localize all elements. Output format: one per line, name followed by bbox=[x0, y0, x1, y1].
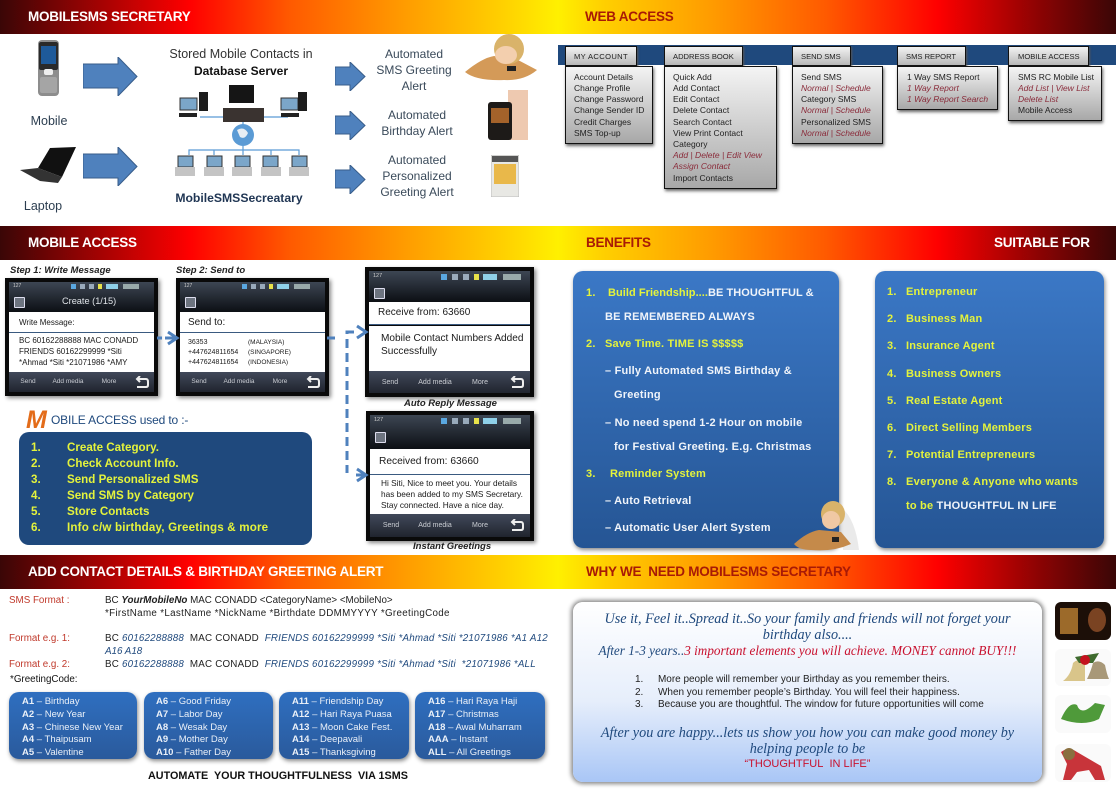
menu: mobile access: Delete List bbox=[1018, 94, 1058, 104]
menu: sms report: SMS REPORT bbox=[906, 52, 956, 61]
panel: suitable for: Potential Entrepreneurs bbox=[906, 449, 1035, 461]
panel: mobile access uses: 6. bbox=[31, 521, 41, 534]
phone: write message: *Ahmad *Siti *21071986 *AMY bbox=[19, 358, 128, 367]
panel: greeting codes a1 to a5: A1 – Birthday bbox=[22, 696, 80, 707]
heading: mobile access used to: OBILE ACCESS used to :- bbox=[51, 413, 188, 427]
phone: instant greeting: has been added to my SMS Secretary. bbox=[381, 489, 523, 499]
panel: benefits bbox=[573, 271, 839, 548]
panel: greeting codes a1 to a5: A2 – New Year bbox=[22, 709, 85, 720]
phone: write message: Write Message: bbox=[19, 318, 74, 327]
dashed arrows between phones bbox=[157, 324, 369, 482]
panel: suitable for: Everyone & Anyone who wants bbox=[906, 476, 1078, 488]
menu: address book: View Print Contact bbox=[673, 128, 743, 138]
panel: greeting codes a16 to all: A16 – Hari Raya Haji bbox=[428, 696, 517, 707]
panel: suitable for: Real Estate Agent bbox=[906, 395, 1003, 407]
panel: suitable for: 4. bbox=[887, 368, 897, 380]
text: script closing bbox=[600, 725, 1014, 757]
panel: benefits: BE REMEMBERED ALWAYS bbox=[605, 311, 755, 323]
list: three reasons: 2. bbox=[635, 686, 643, 698]
menu: send sms: Personalized SMS bbox=[801, 117, 871, 127]
web access menu band bbox=[558, 45, 1116, 65]
text: sms greeting alert bbox=[376, 47, 452, 93]
menu: my account: MY ACCOUNT bbox=[574, 52, 628, 61]
phone: send to: (MALAYSIA) bbox=[248, 339, 284, 346]
text block: sms format: Format e.g. 2: bbox=[9, 659, 70, 670]
phone: send to: Send bbox=[191, 378, 207, 385]
phone: write message: 127 bbox=[13, 283, 21, 289]
menu: my account: Change Password bbox=[574, 94, 643, 104]
list: reason text: More people will remember your Birthday as you remember theirs. bbox=[658, 674, 950, 685]
text: sms greeting alert: Automated bbox=[385, 47, 443, 61]
panel: suitable for: Entrepreneur bbox=[906, 286, 977, 298]
phone: send to: (INDONESIA) bbox=[248, 359, 288, 366]
image: festival lights bbox=[1055, 602, 1111, 640]
panel: benefits: Build Friendship....BE THOUGHTFUL & bbox=[608, 287, 814, 299]
text: sms greeting alert: SMS Greeting bbox=[376, 63, 452, 77]
image: selamat aidilfitri bbox=[1061, 703, 1105, 723]
menu: sms report: 1 Way Report Search bbox=[907, 94, 988, 104]
phone: instant greeting bbox=[366, 411, 534, 541]
menu: mobile access bbox=[1006, 46, 1106, 126]
arrow: laptop to server bbox=[83, 147, 138, 186]
panel: suitable for: 8. bbox=[887, 476, 896, 488]
icon: laptop bbox=[20, 147, 76, 183]
image: small woman with phone bbox=[794, 501, 859, 550]
panel: greeting codes a16 to all: AAA – Instant bbox=[428, 734, 488, 745]
phone: write message bbox=[5, 278, 158, 396]
phone: instant greeting: Received from: 63660 bbox=[379, 456, 479, 467]
menu: my account: Credit Charges bbox=[574, 117, 631, 127]
panel: benefits: 1. bbox=[586, 287, 596, 299]
panel: mobile access uses bbox=[19, 432, 312, 545]
panel: greeting codes a11 to a15: A14 – Deepavali bbox=[292, 734, 362, 745]
menu: mobile access: SMS RC Mobile List bbox=[1018, 72, 1094, 82]
text: birthday alert: Birthday Alert bbox=[381, 124, 453, 138]
heading: stored contacts bbox=[169, 47, 313, 78]
panel: greeting codes a16 to all: ALL – All Greetings bbox=[428, 747, 511, 758]
panel: greeting codes a6 to a10: A8 – Wesak Day bbox=[156, 722, 227, 733]
panel: mobile access uses: 5. bbox=[31, 505, 41, 518]
list: reason text: When you remember people’s Birthday. You will feel their happiness. bbox=[658, 686, 960, 698]
panel: mobile access uses: Send SMS by Category bbox=[67, 489, 194, 502]
panel: mobile access uses: 4. bbox=[31, 489, 41, 502]
phone: auto reply: Successfully bbox=[381, 346, 437, 357]
text block: sms format bbox=[9, 595, 548, 685]
menu: my account bbox=[564, 46, 656, 148]
menu: address book: Search Contact bbox=[673, 117, 732, 127]
menu: mobile access: Mobile Access bbox=[1018, 105, 1072, 115]
text block: sms format: A16 A18 bbox=[105, 646, 142, 657]
menu: address book: Add | Delete | Edit View bbox=[673, 150, 762, 160]
label: mobilesmssecreatary: MobileSMSSecreatary bbox=[175, 191, 303, 205]
menu: sms report: 1 Way Report bbox=[907, 83, 959, 93]
text: script intro: After 1-3 years..3 important elements you will achieve. MONEY cannot BUY!!! bbox=[599, 643, 1016, 658]
panel: benefits: Save Time. TIME IS $$$$$ bbox=[605, 338, 744, 350]
phone: send to: 36353 bbox=[188, 339, 207, 346]
text: script closing: After you are happy...lets us show you how you can make good money by bbox=[601, 725, 1014, 741]
image: woman with phone bbox=[465, 34, 537, 80]
menu: mobile access: Add List | View List bbox=[1018, 83, 1090, 93]
phone: send to: Send to: bbox=[188, 317, 225, 328]
text: personalized greeting alert: Personalized bbox=[382, 169, 452, 183]
panel: greeting codes a16 to all bbox=[415, 692, 545, 759]
phone: send to: Add media bbox=[223, 378, 255, 385]
header bar: mobilesms secretary and web access: WEB ACCESS bbox=[585, 9, 674, 24]
list: reason text: Because you are thoughtful. The window for future opportunities will come bbox=[658, 699, 984, 710]
panel: benefits: – Auto Retrieval bbox=[605, 495, 692, 507]
panel: greeting codes a1 to a5: A5 – Valentine bbox=[22, 747, 84, 758]
panel: benefits: 3. bbox=[586, 468, 596, 480]
phone: write message: Add media bbox=[52, 378, 84, 385]
phone: write message: BC 60162288888 MAC CONADD bbox=[19, 336, 138, 345]
phone: send to: +447624811654 bbox=[188, 359, 238, 366]
panel: suitable for: Insurance Agent bbox=[906, 340, 995, 352]
panel: greeting codes a11 to a15: A12 – Hari Raya Puasa bbox=[292, 709, 392, 720]
menu: sms report: 1 Way SMS Report bbox=[907, 72, 979, 82]
panel: suitable for bbox=[875, 271, 1104, 548]
phone: auto reply: Mobile Contact Numbers Added bbox=[381, 333, 524, 344]
panel: suitable for: Business Owners bbox=[906, 368, 1001, 380]
text block: sms format: *GreetingCode: bbox=[10, 674, 78, 685]
caption: instant greetings: Instant Greetings bbox=[413, 541, 491, 552]
panel: mobile access uses: Check Account Info. bbox=[67, 457, 179, 470]
caption: step 2: Step 2: Send to bbox=[176, 265, 245, 276]
panel: greeting codes a11 to a15: A13 – Moon Cake Fest. bbox=[292, 722, 392, 733]
panel: suitable for: 6. bbox=[887, 422, 897, 434]
image: phone and face bbox=[488, 90, 528, 140]
panel: mobile access uses: 1. bbox=[31, 441, 41, 454]
panel: suitable for: 1. bbox=[887, 286, 897, 298]
text: personalized greeting alert: Automated bbox=[388, 153, 446, 167]
menu: my account: Account Details bbox=[574, 72, 633, 82]
menu: send sms: Category SMS bbox=[801, 94, 856, 104]
text block: sms format: BC 60162288888 MAC CONADD FRIENDS 60162299999 *Siti *Ahmad *Siti *21071986 *ALL bbox=[105, 659, 536, 670]
phone: instant greeting: Stay connected. Have a nice day. bbox=[381, 500, 504, 510]
text block: sms format: BC 60162288888 MAC CONADD FRIENDS 60162299999 *Siti *Ahmad *Siti *21071986 *A1 A12 bbox=[105, 633, 548, 644]
text: birthday alert: Automated bbox=[388, 108, 446, 122]
panel: suitable for: 3. bbox=[887, 340, 897, 352]
menu: mobile access: MOBILE ACCESS bbox=[1018, 52, 1080, 61]
menu: address book: Edit Contact bbox=[673, 94, 719, 104]
text block: sms format: Format e.g. 1: bbox=[9, 633, 70, 644]
heading: mobile access used to: M bbox=[26, 406, 47, 434]
phone: instant greeting: Add media bbox=[418, 522, 452, 529]
menu: sms report bbox=[896, 46, 1002, 114]
menu: send sms: Send SMS bbox=[801, 72, 842, 82]
panel: mobile access uses: Create Category. bbox=[67, 441, 159, 454]
menu: address book: Import Contacts bbox=[673, 173, 733, 183]
phone: auto reply: More bbox=[472, 379, 488, 386]
panel: mobile access uses: 2. bbox=[31, 457, 41, 470]
header bar: mobile access, benefits, suitable for: SUITABLE FOR bbox=[994, 235, 1090, 250]
list: three reasons bbox=[635, 674, 643, 710]
text: birthday alert bbox=[381, 108, 453, 138]
list: three reasons: 3. bbox=[635, 699, 643, 710]
panel: greeting codes a1 to a5 bbox=[9, 692, 137, 759]
panel: benefits: Reminder System bbox=[610, 468, 706, 480]
image: lion dance bbox=[1061, 748, 1105, 780]
menu: my account: Change Profile bbox=[574, 83, 630, 93]
menu: send sms: Normal | Schedule bbox=[801, 105, 871, 115]
panel: suitable for: 2. bbox=[887, 313, 897, 325]
phone: auto reply: Add media bbox=[418, 379, 452, 386]
label: laptop: Laptop bbox=[24, 199, 62, 213]
list: three reasons: 1. bbox=[635, 674, 643, 685]
panel: suitable for: Direct Selling Members bbox=[906, 422, 1032, 434]
panel: greeting codes a6 to a10: A7 – Labor Day bbox=[156, 709, 223, 720]
menu: address book: Add Contact bbox=[673, 83, 720, 93]
label: mobile: Mobile bbox=[31, 114, 67, 128]
text: personalized greeting alert: Greeting Alert bbox=[380, 185, 454, 199]
image: christmas bells bbox=[1063, 653, 1109, 681]
panel: greeting codes a1 to a5: A4 – Thaipusam bbox=[22, 734, 92, 745]
panel: greeting codes a6 to a10 bbox=[144, 692, 273, 759]
text: thoughtful in life: “THOUGHTFUL IN LIFE” bbox=[745, 758, 870, 770]
phone: auto reply: 127 bbox=[373, 273, 382, 279]
header bar: add contact details and why we need: WHY WE NEED MOBILESMS SECRETARY bbox=[586, 564, 851, 579]
menu: my account: Change Sender ID bbox=[574, 105, 644, 115]
panel: greeting codes a11 to a15 bbox=[279, 692, 409, 759]
arrow: greeting alert bbox=[335, 62, 366, 91]
panel: suitable for: to be THOUGHTFUL IN LIFE bbox=[906, 500, 1057, 512]
menu: address book: Quick Add bbox=[673, 72, 712, 82]
phone: send to: +447624811654 bbox=[188, 349, 238, 356]
text: script intro bbox=[598, 611, 1016, 658]
arrow: personalized alert bbox=[335, 165, 366, 194]
phone: instant greeting: Hi Siti, Nice to meet you. Your details bbox=[381, 478, 517, 488]
header bar: mobilesms secretary and web access bbox=[0, 0, 1116, 34]
panel: mobile access uses: Info c/w birthday, Greetings & more bbox=[67, 521, 268, 534]
text: personalized greeting alert bbox=[380, 153, 454, 199]
phone: write message: More bbox=[102, 378, 116, 385]
menu: address book: ADDRESS BOOK bbox=[673, 52, 734, 61]
menu: send sms: Normal | Schedule bbox=[801, 83, 871, 93]
phone: send to bbox=[176, 278, 329, 396]
text block: sms format: *FirstName *LastName *NickName *Birthdate DDMMYYYY *GreetingCode bbox=[105, 608, 450, 619]
panel: benefits: – Fully Automated SMS Birthday & bbox=[605, 365, 792, 377]
caption: step 1: Step 1: Write Message bbox=[10, 265, 111, 276]
header bar: mobile access, benefits, suitable for: MOBILE ACCESS bbox=[28, 235, 137, 250]
panel: suitable for: 5. bbox=[887, 395, 897, 407]
panel: suitable for: Business Man bbox=[906, 313, 982, 325]
tagline: automate your thoughtfulness: AUTOMATE YOUR THOUGHTFULNESS VIA 1SMS bbox=[148, 770, 408, 782]
menu: send sms: SEND SMS bbox=[801, 52, 841, 61]
panel: mobile access uses: 3. bbox=[31, 473, 41, 486]
header bar: mobile access, benefits, suitable for: BENEFITS bbox=[586, 235, 651, 250]
menu: address book: Delete Contact bbox=[673, 105, 729, 115]
panel: why we need bbox=[573, 602, 1042, 782]
panel: benefits: – No need spend 1-2 Hour on mobile bbox=[605, 417, 802, 429]
phone: auto reply: Receive from: 63660 bbox=[378, 307, 470, 318]
panel: benefits: – Automatic User Alert System bbox=[605, 522, 771, 534]
panel: suitable for: 7. bbox=[887, 449, 897, 461]
panel: mobile access uses: Store Contacts bbox=[67, 505, 149, 518]
text block: sms format: BC YourMobileNo MAC CONADD <CategoryName> <MobileNo> bbox=[105, 595, 393, 606]
menu: address book bbox=[662, 46, 780, 194]
text: script intro: Use it, Feel it..Spread it..So your family and friends will not forget your bbox=[604, 611, 1010, 627]
phone: auto reply: Send bbox=[382, 379, 398, 386]
image: phone screenshot bbox=[491, 155, 519, 197]
header bar: mobilesms secretary and web access: MOBILESMS SECRETARY bbox=[28, 9, 191, 24]
caption: auto reply message: Auto Reply Message bbox=[404, 398, 497, 409]
phone: instant greeting: Send bbox=[383, 522, 399, 529]
phone: instant greeting: 127 bbox=[374, 417, 383, 423]
text: sms greeting alert: Alert bbox=[402, 79, 426, 93]
menu: my account: SMS Top-up bbox=[574, 128, 621, 138]
panel: benefits: Greeting bbox=[614, 389, 661, 401]
heading: stored contacts: Database Server bbox=[194, 64, 288, 78]
text: script closing: helping people to be bbox=[750, 741, 865, 757]
phone: send to: More bbox=[273, 378, 287, 385]
arrow: birthday alert bbox=[335, 111, 366, 140]
header bar: add contact details and why we need bbox=[0, 555, 1116, 589]
menu: address book: Category bbox=[673, 139, 708, 149]
heading: stored contacts: Stored Mobile Contacts in bbox=[169, 47, 313, 61]
panel: greeting codes a11 to a15: A15 – Thanksgiving bbox=[292, 747, 376, 758]
phone: instant greeting: More bbox=[472, 522, 488, 529]
icon: mobile phone bbox=[38, 40, 59, 96]
panel: mobile access uses: Send Personalized SMS bbox=[67, 473, 198, 486]
text block: sms format: SMS Format : bbox=[9, 595, 69, 606]
phone: write message: Send bbox=[20, 378, 36, 385]
arrow: mobile to server bbox=[83, 57, 138, 96]
text: script intro: birthday also.... bbox=[763, 627, 852, 643]
menu: send sms bbox=[790, 46, 886, 148]
network diagram bbox=[175, 85, 309, 176]
header bar: add contact details and why we need: ADD CONTACT DETAILS & BIRTHDAY GREETING ALERT bbox=[28, 564, 383, 579]
panel: greeting codes a6 to a10: A9 – Mother Day bbox=[156, 734, 228, 745]
list: reason text bbox=[658, 674, 984, 710]
panel: greeting codes a16 to all: A18 – Awal Muharram bbox=[428, 722, 522, 733]
menu: send sms: Normal | Schedule bbox=[801, 128, 871, 138]
menu: address book: Assign Contact bbox=[673, 161, 730, 171]
panel: greeting codes a6 to a10: A10 – Father Day bbox=[156, 747, 231, 758]
phone: send to: 127 bbox=[184, 283, 192, 289]
panel: greeting codes a11 to a15: A11 – Friendship Day bbox=[292, 696, 383, 707]
panel: benefits: for Festival Greeting. E.g. Christmas bbox=[614, 441, 812, 453]
phone: write message: Create (1/15) bbox=[62, 296, 116, 306]
panel: greeting codes a16 to all: A17 – Christmas bbox=[428, 709, 499, 720]
header bar: mobile access, benefits, suitable for bbox=[0, 226, 1116, 260]
heading: mobile access used to bbox=[26, 406, 188, 434]
phone: write message: FRIENDS 60162299999 *Siti bbox=[19, 347, 122, 356]
panel: greeting codes a1 to a5: A3 – Chinese New Year bbox=[22, 722, 123, 733]
phone: send to: (SINGAPORE) bbox=[248, 349, 291, 356]
panel: benefits: 2. bbox=[586, 338, 596, 350]
phone: auto reply bbox=[365, 267, 534, 397]
panel: greeting codes a6 to a10: A6 – Good Friday bbox=[156, 696, 231, 707]
